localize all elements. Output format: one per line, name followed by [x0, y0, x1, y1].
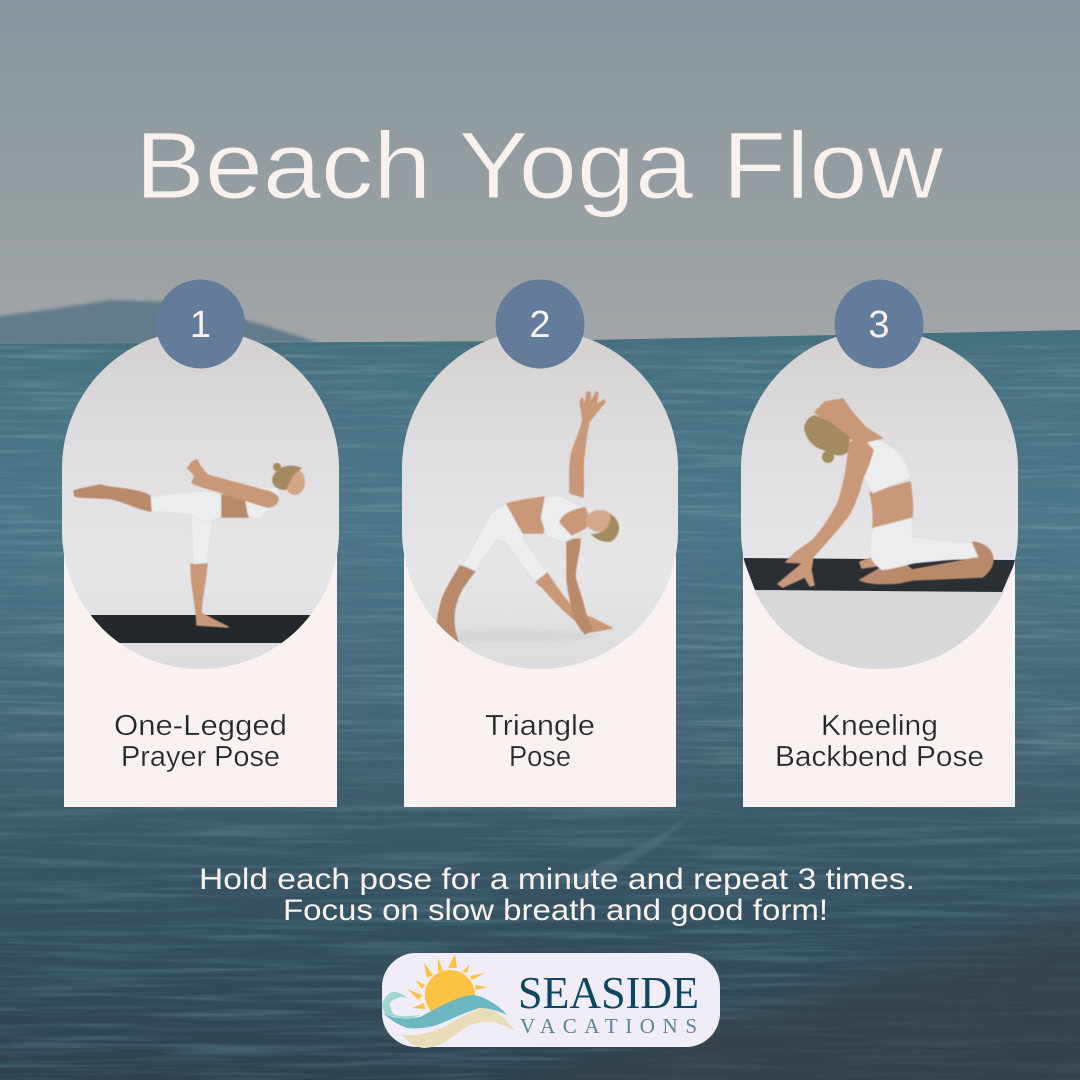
logo: Seaside Vacations — [382, 953, 720, 1048]
photo: kneeling backbend pose — [741, 330, 1018, 669]
label: triangle pose: Pose — [509, 741, 571, 773]
instructions text: Focus on slow breath and good form! — [283, 894, 828, 927]
panel: pose 3 — [741, 280, 1018, 807]
number badge 2: 2 — [529, 304, 551, 346]
card background 3 — [743, 500, 1015, 807]
number badge 1 — [156, 280, 245, 368]
label: one-legged prayer pose: Prayer Pose — [121, 741, 280, 773]
panel: pose 2 — [402, 280, 678, 807]
card background 1 — [64, 500, 337, 807]
icon: sun and waves — [382, 954, 515, 1048]
number badge 3: 3 — [868, 304, 890, 346]
title: Beach Yoga Flow — [135, 113, 943, 219]
photo: one-legged prayer pose — [62, 330, 339, 669]
label: triangle pose: Triangle — [485, 710, 595, 742]
number badge 1: 1 — [190, 304, 211, 346]
label: kneeling backbend pose: Backbend Pose — [775, 741, 984, 773]
card background 2 — [404, 500, 676, 807]
number badge 3 — [834, 280, 924, 368]
panel: pose 1 — [62, 280, 339, 807]
label: kneeling backbend pose: Kneeling — [821, 710, 938, 742]
logo subtitle: VACATIONS — [520, 1014, 697, 1038]
number badge 2 — [496, 280, 584, 368]
logo wordmark: SEASIDE — [518, 967, 699, 1018]
instructions text: Hold each pose for a minute and repeat 3 times. — [199, 863, 915, 896]
label: one-legged prayer pose: One-Legged — [114, 710, 287, 742]
photo: triangle pose — [402, 330, 678, 669]
